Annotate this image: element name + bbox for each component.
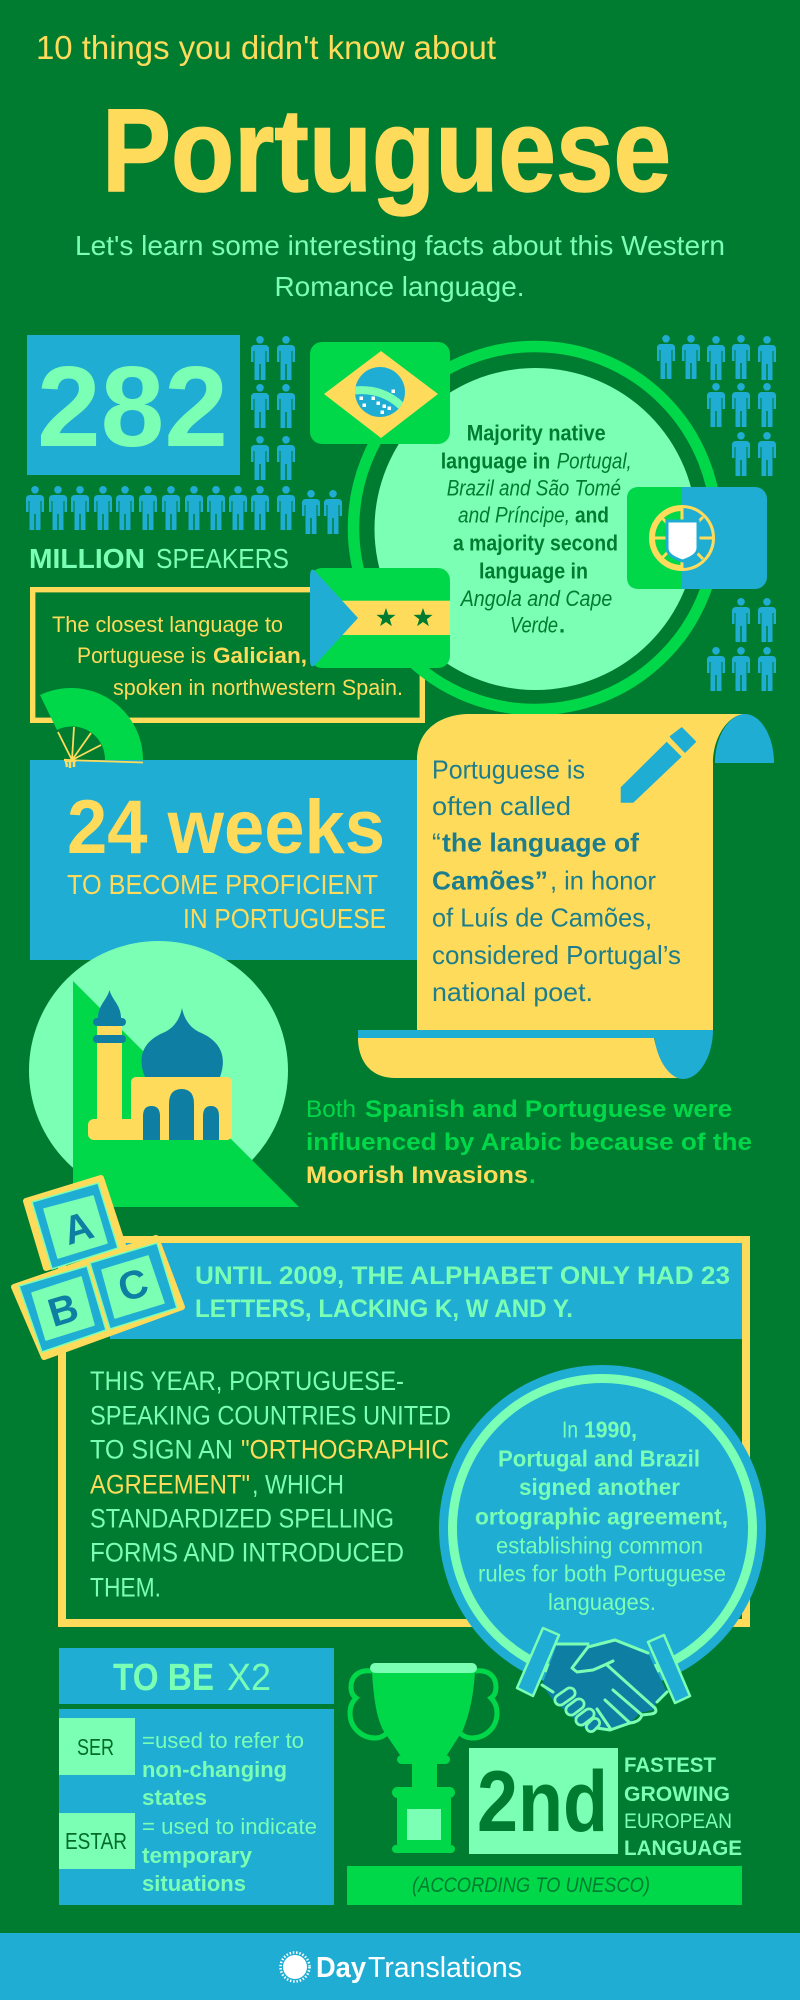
ring with native language text: language in	[479, 558, 588, 583]
caption	[67, 869, 386, 934]
panel: Galician callout: The closest language to	[52, 612, 283, 637]
panel: ser and estar	[59, 1709, 334, 1905]
icon: logo	[280, 1952, 310, 1982]
icon: ABC blocks	[14, 1178, 182, 1357]
subtitle	[75, 230, 725, 302]
people pictogram left	[26, 336, 342, 534]
big number: 24 weeks	[67, 785, 385, 870]
panel: 24 weeks	[30, 760, 422, 960]
panel: scroll	[358, 714, 774, 1079]
text: Arabic influence: .	[529, 1162, 536, 1189]
ring with native language text: Portugal,	[557, 448, 632, 473]
text: fastest growing: GROWING	[624, 1783, 730, 1806]
ring with native language text: and Príncipe,	[458, 503, 570, 528]
panel: Galician callout	[33, 590, 422, 720]
definitions: states	[142, 1785, 207, 1810]
definitions: =used to refer to	[142, 1728, 304, 1753]
panel: UNESCO source: (ACCORDING TO UNESCO)	[412, 1874, 650, 1897]
text: fastest growing: EUROPEAN	[624, 1810, 732, 1833]
orthographic agreement text: SPEAKING COUNTRIES UNITED	[90, 1400, 451, 1430]
ring with native language text: Brazil and São Tomé	[447, 476, 621, 501]
orthographic agreement text: "ORTHOGRAPHIC	[241, 1434, 449, 1464]
definitions	[142, 1728, 317, 1896]
brand name: Day	[316, 1952, 366, 1984]
definitions: non-changing	[142, 1757, 287, 1782]
alphabet heading: UNTIL 2009, THE ALPHABET ONLY HAD 23	[195, 1262, 730, 1290]
scroll text: , in honor	[550, 865, 656, 895]
icon: fan	[40, 688, 143, 768]
kicker: 10 things you didn't know about	[36, 29, 496, 66]
text: fastest growing	[624, 1754, 742, 1860]
ring with native language text: language in	[441, 448, 550, 473]
caption: IN PORTUGUESE	[183, 903, 386, 934]
panel: UNESCO source	[347, 1866, 742, 1905]
subtitle: Romance language.	[274, 271, 524, 302]
ring with native language text	[354, 346, 716, 710]
text: Arabic influence: Moorish Invasions	[306, 1162, 528, 1189]
brand name: Translations	[368, 1952, 522, 1984]
icon: Sao Tome flag	[310, 568, 450, 668]
footer	[0, 1933, 800, 2000]
ser label: SER	[77, 1734, 114, 1760]
estar label: ESTAR	[65, 1828, 127, 1854]
panel: 1990 circle	[439, 1365, 766, 1692]
definitions: situations	[142, 1871, 246, 1896]
definitions: = used to indicate	[142, 1814, 317, 1839]
icon: ABC blocks: B	[43, 1285, 83, 1336]
orthographic agreement text: TO SIGN AN	[90, 1434, 233, 1464]
orthographic agreement text: THEM.	[90, 1573, 161, 1603]
scroll text: often called	[432, 791, 571, 821]
text: Arabic influence: Spanish and Portuguese were	[365, 1096, 732, 1123]
alphabet heading: LETTERS, LACKING K, W AND Y.	[195, 1295, 573, 1323]
panel: to be heading: X2	[227, 1657, 271, 1699]
panel: 1990 circle: 1990,	[584, 1417, 637, 1443]
text: fastest growing: LANGUAGE	[624, 1837, 742, 1860]
orthographic agreement text: FORMS AND INTRODUCED	[90, 1538, 404, 1568]
orthographic agreement text: STANDARDIZED SPELLING	[90, 1504, 394, 1534]
text: Arabic influence	[306, 1096, 752, 1189]
ring with native language text: and	[575, 503, 609, 528]
panel: Galician callout: Galician,	[213, 643, 307, 668]
icon: handshake	[517, 1628, 690, 1730]
text: Arabic influence: Both	[306, 1096, 356, 1123]
scroll text: of Luís de Camões,	[432, 903, 652, 933]
orthographic agreement text	[90, 1366, 451, 1603]
scroll text: Camões”	[432, 865, 548, 895]
estar label	[59, 1813, 135, 1869]
orthographic agreement text: AGREEMENT"	[90, 1469, 250, 1499]
panel: Galician callout: Portuguese is	[77, 643, 206, 668]
alphabet heading	[195, 1262, 730, 1323]
ring with native language text: Angola and Cape	[459, 586, 612, 611]
icon: trophy	[350, 1663, 497, 1853]
ring with native language text: a majority second	[453, 531, 618, 556]
ser label	[59, 1718, 135, 1775]
icon: Brazil flag	[310, 342, 450, 444]
icon: Portuguese emblem flag	[627, 487, 767, 589]
scroll text	[432, 754, 681, 1007]
ring with native language text: Verde	[510, 612, 558, 637]
caption: TO BECOME PROFICIENT	[67, 869, 378, 900]
scroll text: considered Portugal’s	[432, 940, 681, 970]
panel: alphabet frame	[62, 1240, 746, 1623]
people pictogram right	[657, 335, 776, 691]
icon: pencil	[621, 728, 695, 803]
million speakers label	[29, 543, 289, 574]
million speakers label: MILLION	[29, 543, 145, 574]
definitions: temporary	[142, 1843, 253, 1868]
ring with native language text: .	[559, 612, 565, 637]
scroll text: “	[432, 828, 441, 858]
panel: speakers count	[27, 335, 240, 475]
panel: 1990 circle: Portugal and Brazil	[498, 1446, 700, 1472]
number 282: 282	[37, 344, 228, 471]
panel: Galician callout: spoken in northwestern Spain.	[113, 675, 403, 700]
panel: 1990 circle: rules for both Portuguese	[478, 1561, 726, 1587]
panel: to be heading	[59, 1648, 334, 1704]
panel: 1990 circle: ortographic agreement,	[475, 1503, 728, 1529]
panel: 1990 circle: establishing common	[496, 1532, 703, 1558]
title: Portuguese	[102, 85, 671, 217]
icon: ABC blocks: A	[58, 1203, 98, 1254]
text: fastest growing: FASTEST	[624, 1754, 716, 1777]
orthographic agreement text: , WHICH	[252, 1469, 344, 1499]
panel: 1990 circle: signed another	[519, 1474, 680, 1500]
scroll text: Portuguese is	[432, 754, 585, 784]
text: Arabic influence: influenced by Arabic because of the	[306, 1129, 752, 1156]
scroll text: the language of	[442, 828, 639, 858]
panel: 1990 circle: languages.	[548, 1589, 656, 1615]
panel: 2nd badge: 2nd	[477, 1754, 608, 1850]
panel: to be heading: TO BE	[113, 1657, 214, 1699]
million speakers label: SPEAKERS	[156, 543, 289, 574]
icon: mosque	[29, 941, 299, 1207]
orthographic agreement text: THIS YEAR, PORTUGUESE-	[90, 1366, 404, 1396]
header	[36, 29, 725, 302]
subtitle: Let's learn some interesting facts about this Western	[75, 230, 725, 261]
scroll text: national poet.	[432, 977, 593, 1007]
panel: 1990 circle: In	[562, 1417, 578, 1443]
icon: ABC blocks: C	[113, 1260, 153, 1311]
ring with native language text: Majority native	[467, 421, 606, 446]
